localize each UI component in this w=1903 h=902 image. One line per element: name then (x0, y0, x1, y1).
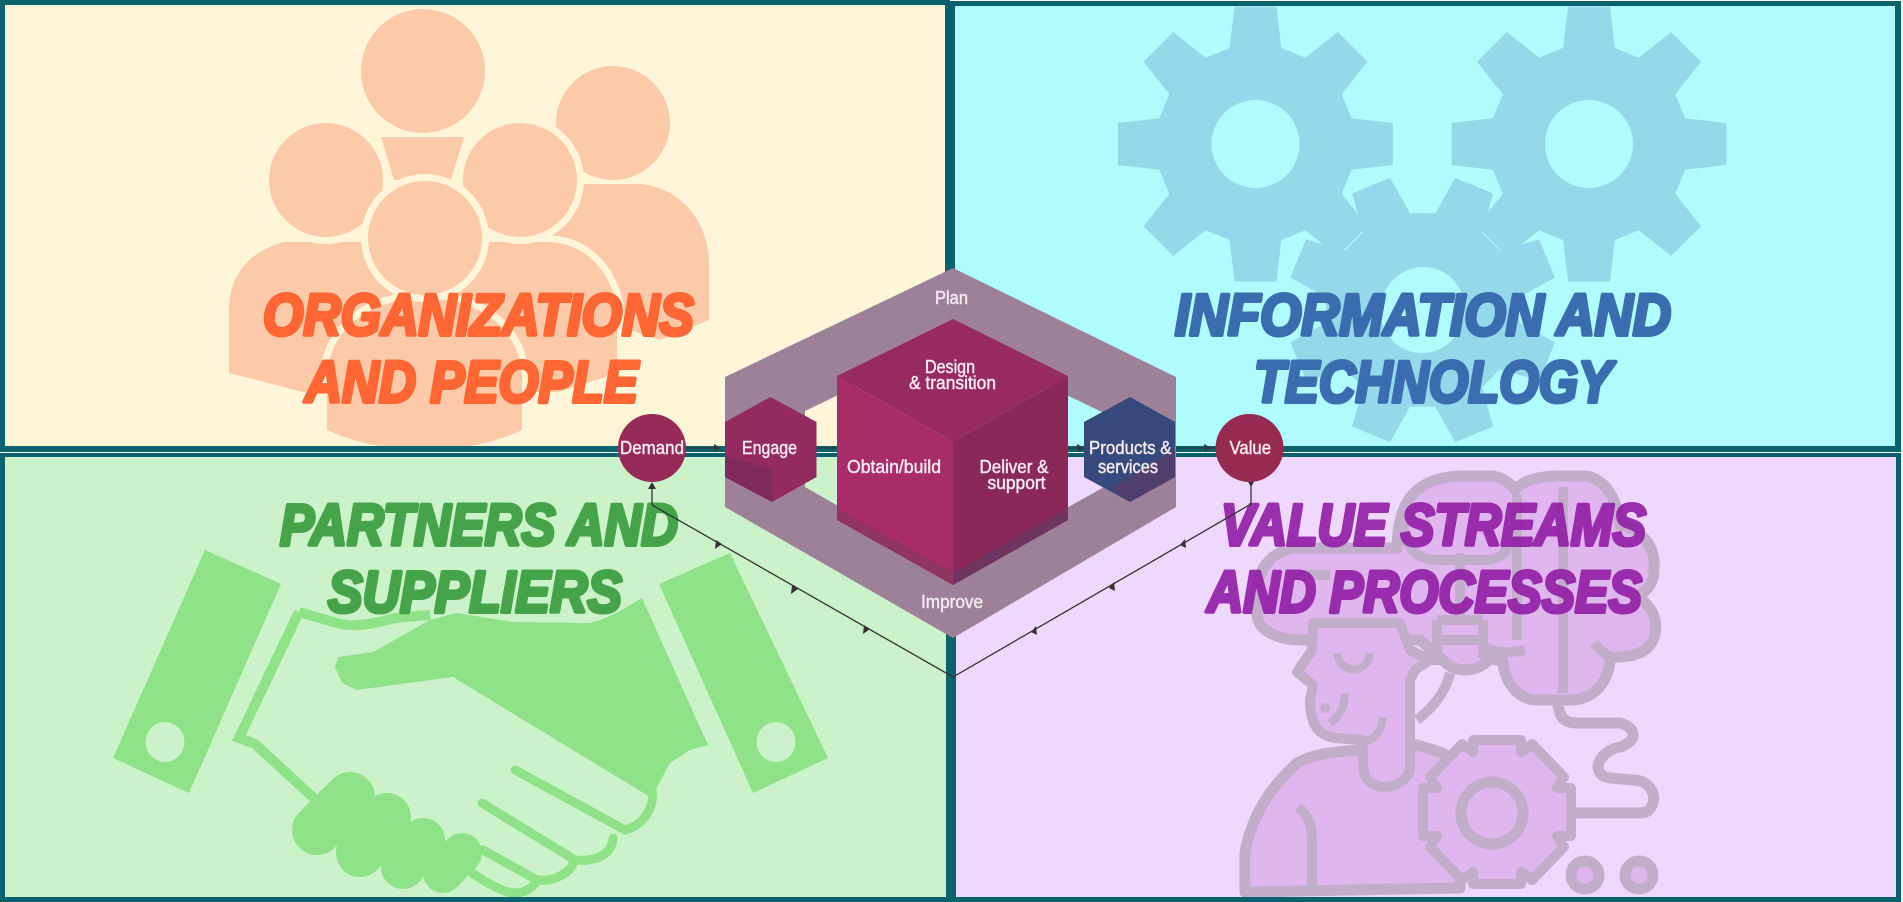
heading: partners and suppliers (280, 493, 678, 625)
brain (1256, 476, 1656, 700)
hexagon: engage (725, 397, 816, 502)
hexagon: products and services: Products & (1089, 438, 1172, 458)
label: design and transition: Design (925, 357, 975, 377)
icon: handshake (113, 550, 828, 893)
heading: partners and suppliers: PARTNERS AND (280, 493, 678, 558)
label: improve: Improve (921, 592, 983, 612)
label: obtain/build: Obtain/build (847, 457, 941, 477)
circle: value (1216, 414, 1284, 482)
hexagon: engage: Engage (742, 438, 797, 458)
label: deliver and support: support (988, 473, 1046, 493)
heading: organizations and people: ORGANIZATIONS (263, 283, 694, 348)
panel: partners and suppliers (0, 453, 951, 902)
label: plan: Plan (935, 288, 968, 308)
diagram: service value chain (618, 268, 1284, 677)
icon: three gears (1118, 7, 1726, 486)
heading: value streams and processes: AND PROCESSES (1205, 560, 1642, 625)
flow arrows (686, 444, 1215, 452)
circle: demand: Demand (620, 438, 684, 458)
panel: organizations and people (0, 0, 950, 452)
small gear (1423, 740, 1571, 884)
icon: person with brain and gear (1245, 476, 1656, 892)
icon: group of people (229, 9, 709, 449)
plan-improve ring (725, 268, 1176, 638)
heading: organizations and people: AND PEOPLE (303, 350, 640, 415)
hexagon: products and services (1084, 397, 1175, 502)
label: deliver and support (980, 457, 1048, 493)
label: design and transition: & transition (909, 373, 996, 393)
heading: information and technology: TECHNOLOGY (1254, 350, 1617, 415)
circle: demand (618, 414, 686, 482)
feedback loop arrow (648, 480, 1255, 677)
heading: information and technology (1175, 283, 1671, 415)
hexagon: products and services: services (1098, 457, 1158, 477)
panel: value streams and processes (951, 453, 1901, 902)
heading: organizations and people (263, 283, 694, 415)
label: design and transition (909, 357, 996, 393)
heading: value streams and processes (1205, 493, 1646, 625)
panel: information and technology (950, 1, 1901, 486)
circle: value: Value (1230, 438, 1271, 458)
heading: partners and suppliers: SUPPLIERS (328, 560, 622, 625)
head (1297, 623, 1430, 787)
body (1245, 745, 1460, 892)
cube: design, obtain, deliver (837, 319, 1068, 585)
heading: information and technology: INFORMATION AND (1175, 283, 1671, 348)
label: deliver and support: Deliver & (980, 457, 1048, 477)
heading: value streams and processes: VALUE STREAMS (1221, 493, 1646, 558)
